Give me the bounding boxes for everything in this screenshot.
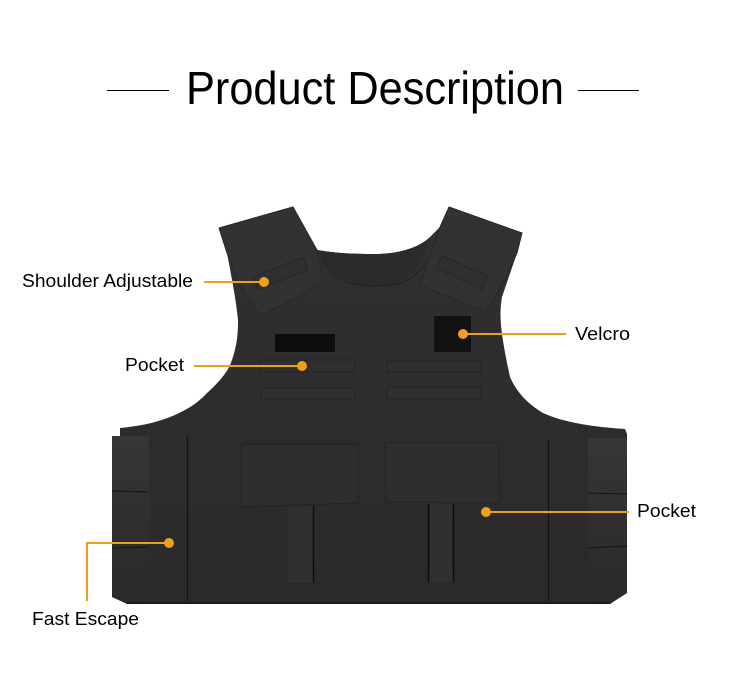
callout: Velcro	[458, 324, 630, 344]
callout: Shoulder Adjustable: Shoulder Adjustable	[22, 271, 193, 291]
callout: Fast Escape: Fast Escape	[32, 609, 139, 629]
right side panel	[548, 438, 627, 603]
vest	[112, 207, 627, 604]
right lower pocket	[385, 443, 500, 582]
right shoulder flap	[420, 207, 522, 312]
left side panel	[112, 436, 188, 603]
callout: Pocket left: Pocket	[125, 355, 184, 375]
left lower pocket	[241, 444, 358, 583]
right velcro	[434, 316, 471, 352]
callout: Fast Escape	[32, 538, 174, 629]
left shoulder flap	[219, 207, 323, 316]
callout: Shoulder Adjustable	[22, 271, 269, 291]
neck lining	[317, 237, 430, 286]
callout: Pocket right	[481, 501, 696, 521]
callout: Velcro: Velcro	[575, 324, 630, 344]
callout: Pocket left	[125, 355, 307, 375]
left velcro	[275, 334, 335, 352]
title: Product Description	[186, 62, 564, 114]
chest strips	[260, 360, 481, 399]
bottom edge	[125, 602, 612, 604]
vest body	[112, 207, 627, 604]
callout: Pocket right: Pocket	[637, 501, 696, 521]
